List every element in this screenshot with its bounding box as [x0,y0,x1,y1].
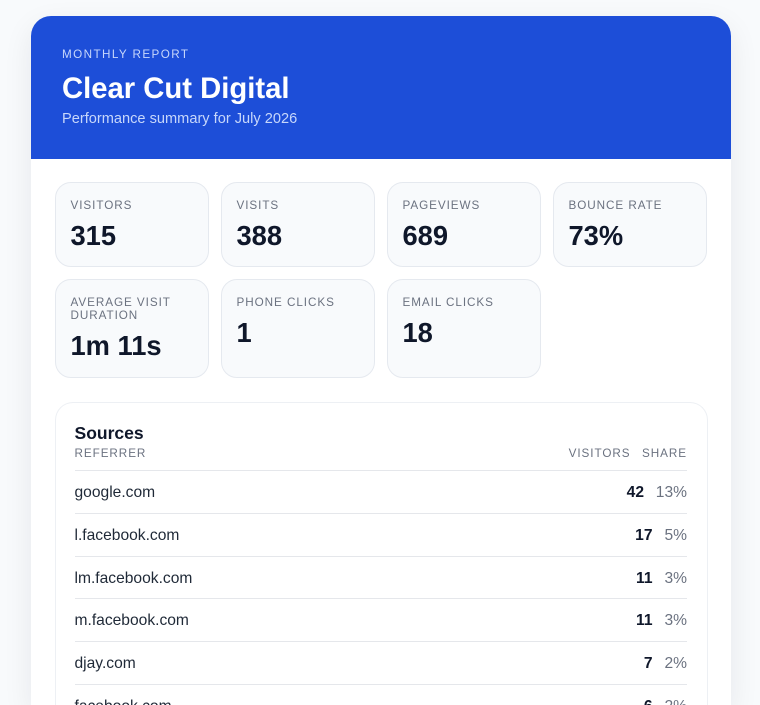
stat: average visit duration: DURATION [70,309,138,322]
stat: visitors: VISITORS [70,198,132,212]
stat: pageviews: 689 [402,220,448,251]
row: djay.com: djay.com [74,654,136,672]
row: facebook.com [74,684,687,705]
row: lm.facebook.com [74,556,687,599]
row: l.facebook.com: 5% [664,526,687,544]
stat: average visit duration [54,279,209,378]
column header: visitors: VISITORS [569,446,630,460]
row: google.com [74,470,687,513]
row: djay.com: 7 [644,654,652,672]
stat: email clicks [386,279,541,378]
row: l.facebook.com [74,513,687,556]
row: l.facebook.com: 17 [635,526,652,544]
stat: phone clicks [220,279,375,378]
stat: phone clicks: 1 [236,317,252,348]
stat: pageviews: PAGEVIEWS [402,198,480,212]
stat: bounce rate: 73% [568,220,623,251]
panel: sources [54,402,708,705]
row: lm.facebook.com: 11 [636,570,652,586]
stat: average visit duration: 1m 11s [70,330,162,361]
row: m.facebook.com: 3% [664,612,687,628]
row: m.facebook.com [74,598,687,641]
row: djay.com [74,641,687,684]
stat: bounce rate [552,182,707,267]
stat: visits: VISITS [236,198,279,212]
stat: visitors: 315 [70,220,116,251]
column header: share: SHARE [642,446,687,460]
row: l.facebook.com: l.facebook.com [74,526,179,544]
header banner [31,16,731,159]
title: Clear Cut Digital [62,73,290,105]
stat: visits [220,182,375,267]
stat: visitors [54,182,209,267]
row: m.facebook.com: m.facebook.com [74,612,189,628]
row: lm.facebook.com: 3% [664,570,687,586]
sources heading: Sources [74,422,144,442]
row: google.com: 13% [656,484,687,500]
row: lm.facebook.com: lm.facebook.com [74,570,192,586]
stat: pageviews [386,182,541,267]
eyebrow label: MONTHLY REPORT [62,48,189,60]
stat: average visit duration: AVERAGE VISIT [70,296,171,308]
stat: email clicks: EMAIL CLICKS [402,296,494,308]
subtitle: Performance summary for July 2026 [62,111,297,127]
stat: visits: 388 [236,220,282,251]
row: m.facebook.com: 11 [636,612,652,628]
column header: referrer: REFERRER [74,446,146,460]
row: google.com: 42 [627,484,644,500]
row: google.com: google.com [74,484,155,500]
stat: phone clicks: PHONE CLICKS [236,296,335,308]
stat: email clicks: 18 [402,317,433,348]
stat: bounce rate: BOUNCE RATE [568,198,662,212]
row: djay.com: 2% [664,654,687,672]
